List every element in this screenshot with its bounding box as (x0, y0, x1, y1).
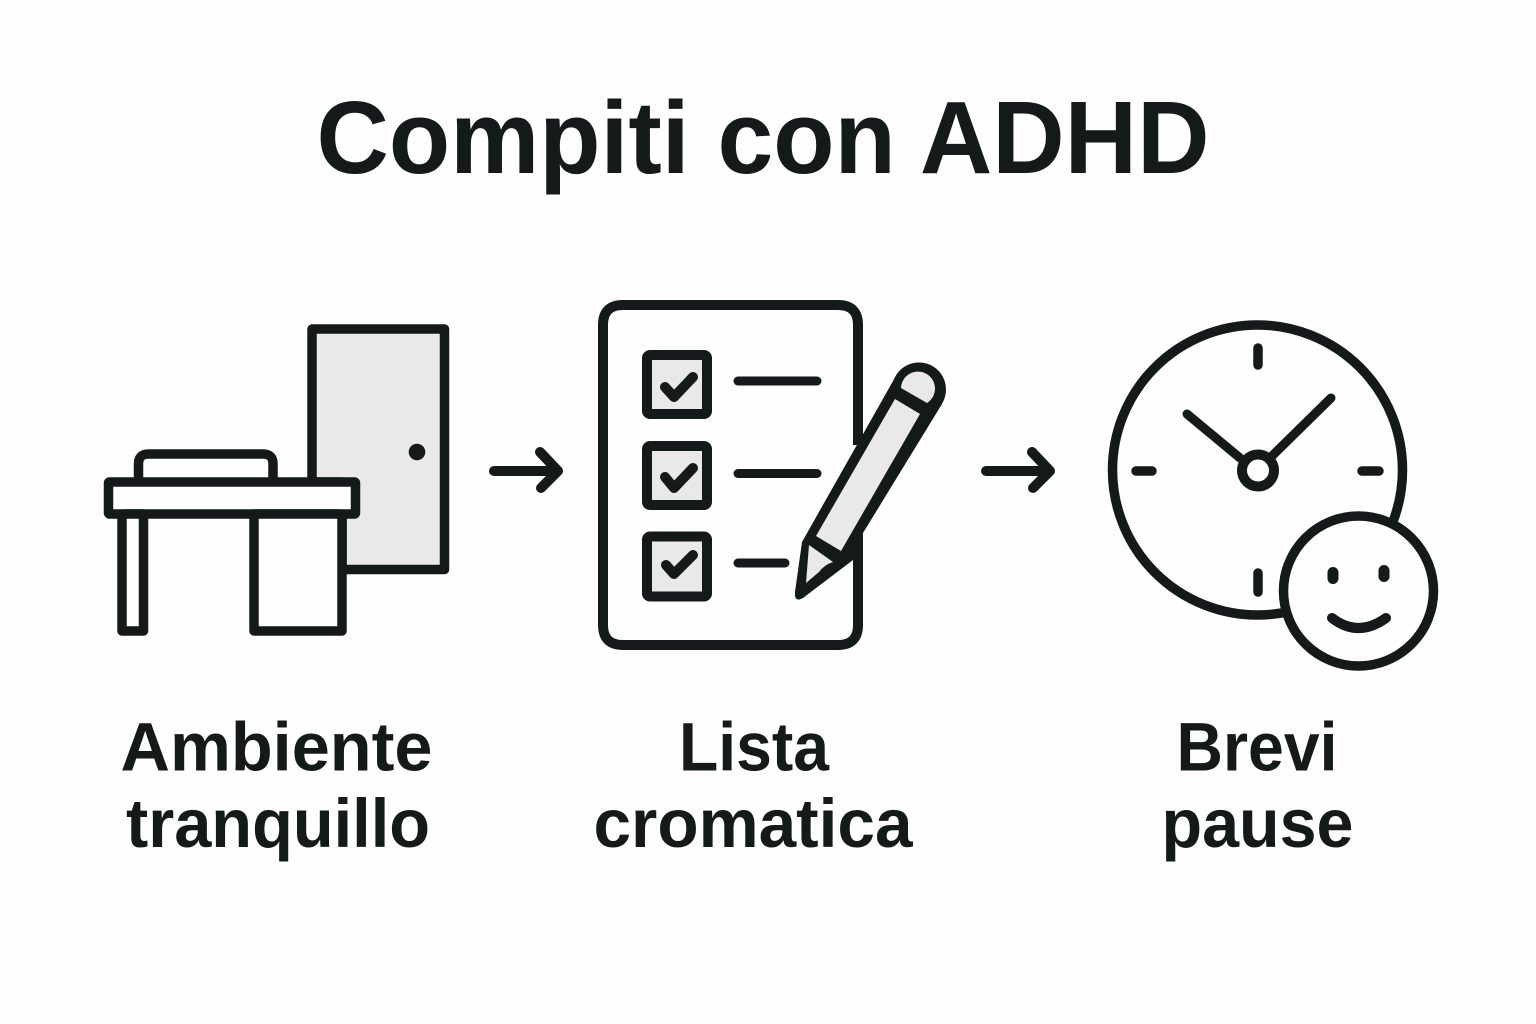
icon: checklist with pencil (603, 305, 946, 645)
label: brevi pause (1162, 708, 1354, 862)
label: lista cromatica: Lista (679, 708, 830, 786)
arrow: second to third (986, 452, 1050, 488)
label: ambiente tranquillo: tranquillo (126, 785, 430, 862)
icon: clock with smiley (1112, 325, 1434, 666)
label: lista cromatica: cromatica (594, 785, 913, 862)
label: ambiente tranquillo: Ambiente (120, 708, 432, 786)
icon: desk and door (108, 329, 444, 631)
label: brevi pause: Brevi (1176, 708, 1338, 786)
label: ambiente tranquillo (120, 708, 432, 862)
title: Compiti con ADHD (316, 80, 1210, 195)
label: lista cromatica (594, 708, 913, 862)
label: brevi pause: pause (1162, 785, 1354, 862)
arrow: first to second (494, 452, 558, 488)
